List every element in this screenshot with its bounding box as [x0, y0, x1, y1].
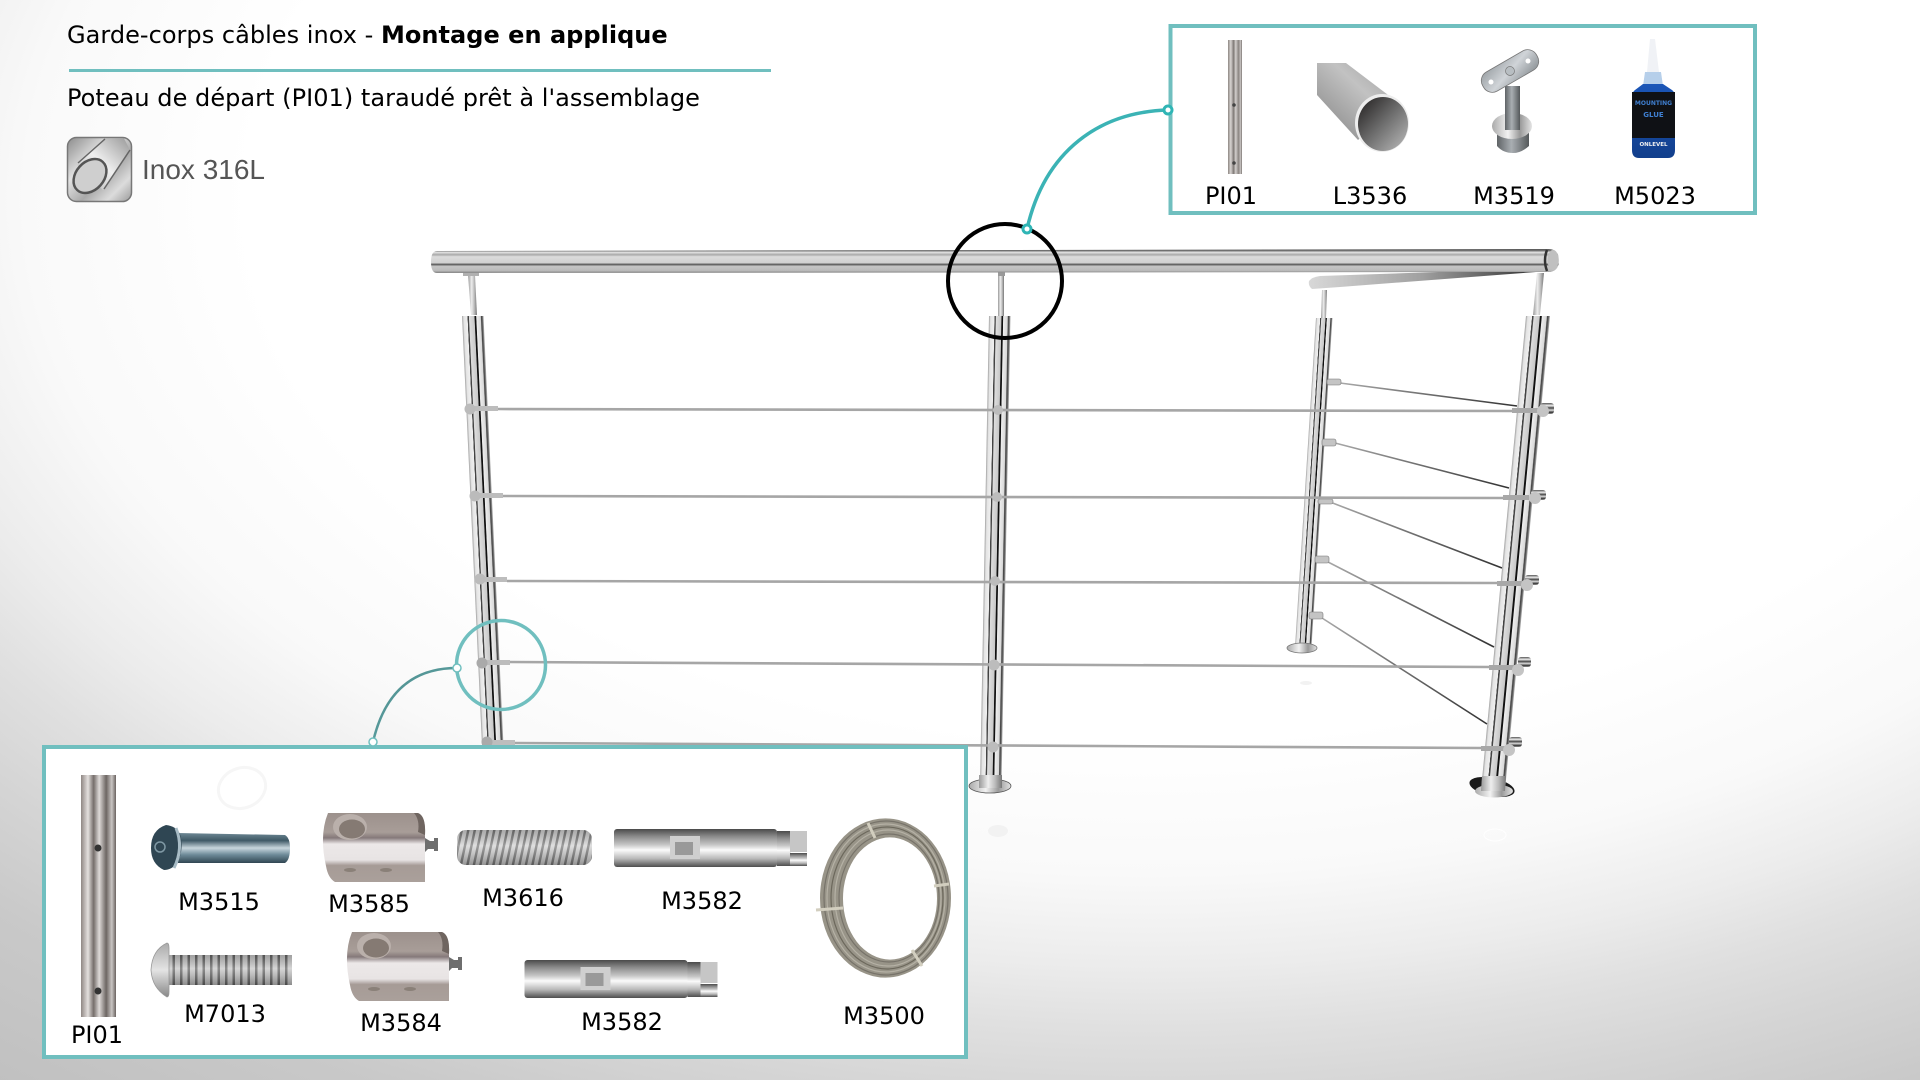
- part: M7013 screw: [151, 943, 292, 1028]
- front right post: [1468, 273, 1550, 801]
- part: M3582 swage: [614, 829, 807, 915]
- part: M3585 clamp: M3585: [328, 890, 410, 918]
- part: M3500 cable coil: [816, 818, 951, 1030]
- left post: [462, 272, 504, 746]
- part: M3616 threaded rod: [457, 830, 592, 912]
- floor marks: [988, 681, 1506, 841]
- part: PI01 post: PI01: [1205, 182, 1257, 210]
- part: PI01 post: [71, 775, 123, 1049]
- panel: handrail parts: [1164, 26, 1755, 213]
- part: M5023 mounting glue: M5023: [1614, 182, 1696, 210]
- part: M3582 swage: [524, 960, 718, 1036]
- part: M7013 screw: M7013: [184, 1000, 266, 1028]
- rear post fittings: [1309, 379, 1341, 619]
- railing illustration: [431, 249, 1559, 841]
- rear post: [1287, 290, 1332, 653]
- part: M3584 clamp: [347, 932, 462, 1037]
- part: M3515 screw: [151, 825, 290, 916]
- part: M3515 screw: M3515: [178, 888, 260, 916]
- part: PI01 post: [1205, 40, 1257, 210]
- part: M3519 handrail support: [1473, 46, 1555, 210]
- material badge: Inox 316L: [67, 138, 265, 202]
- part: M5023 mounting glue: GLUE: [1643, 111, 1664, 119]
- panel: cable parts: [44, 738, 966, 1057]
- part: M3500 cable coil: M3500: [843, 1002, 925, 1030]
- material badge: Inox 316L: Inox 316L: [142, 154, 265, 185]
- icon: stainless tube: [67, 138, 132, 202]
- horizontal cables: [498, 409, 1512, 748]
- right post cable fittings: [1481, 403, 1554, 756]
- part: L3536 tube: L3536: [1333, 182, 1407, 210]
- callout circle: handrail support: [948, 224, 1062, 338]
- callout connector: handrail to top parts panel: [1023, 110, 1168, 233]
- part: M3582 swage: M3582: [581, 1008, 663, 1036]
- part: M5023 mounting glue: ONLEVEL: [1639, 142, 1668, 148]
- left post cable fittings: [464, 404, 515, 748]
- part: M3519 handrail support: M3519: [1473, 182, 1555, 210]
- watermark: [213, 761, 271, 815]
- callout circle: cable fitting: [456, 620, 546, 710]
- middle post: [969, 272, 1011, 793]
- callout connector: cable fitting to bottom parts panel: [373, 664, 461, 742]
- part: M5023 mounting glue: [1614, 39, 1696, 210]
- part: M3584 clamp: M3584: [360, 1009, 442, 1037]
- middle post cable fittings: [988, 405, 1003, 752]
- handrail: [431, 249, 1559, 273]
- side diagonal cables: [1322, 383, 1517, 724]
- part: M5023 mounting glue: MOUNTING: [1635, 100, 1672, 107]
- title: Garde-corps câbles inox - Montage en applique: [67, 21, 668, 49]
- part: M3585 clamp: [323, 813, 438, 918]
- part: M3582 swage: M3582: [661, 887, 743, 915]
- part: PI01 post: PI01: [71, 1021, 123, 1049]
- part: L3536 tube: [1317, 63, 1409, 210]
- handrail return: [1309, 269, 1536, 289]
- subtitle: Poteau de départ (PI01) taraudé prêt à l'assemblage: [67, 84, 700, 112]
- part: M3616 threaded rod: M3616: [482, 884, 564, 912]
